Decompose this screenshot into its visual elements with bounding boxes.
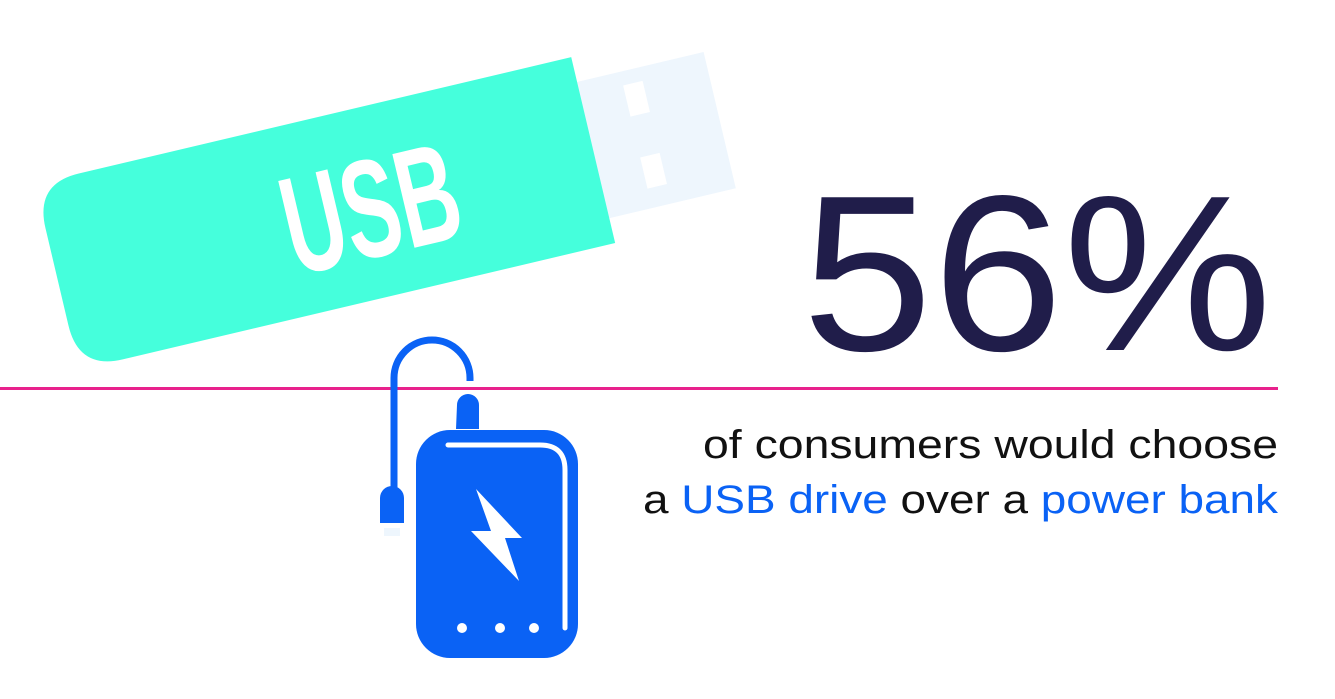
lightning — [471, 489, 522, 581]
plug — [380, 486, 404, 523]
usb connector — [573, 52, 736, 219]
icon: usb drive — [35, 27, 742, 370]
caption: of consumers would choose — [703, 423, 1278, 467]
cable — [394, 340, 470, 488]
caption: a USB drive over a power bank — [643, 478, 1279, 522]
usb label: USB — [266, 112, 475, 305]
divider line — [0, 387, 1278, 390]
caption — [643, 423, 1279, 522]
dots — [457, 623, 539, 633]
top port — [456, 394, 479, 429]
usb body — [35, 57, 615, 370]
icon: power bank — [380, 340, 578, 658]
highlight — [448, 445, 565, 628]
big stat 56%: 56% — [802, 150, 1272, 398]
body — [416, 430, 578, 658]
